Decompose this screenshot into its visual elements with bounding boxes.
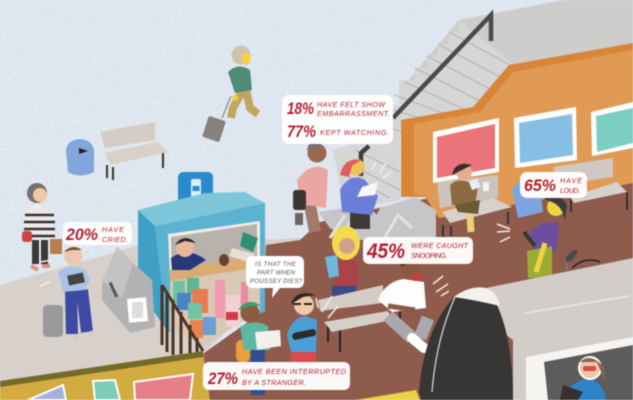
callout: 65%: HAVE xyxy=(560,176,582,185)
man with glasses xyxy=(287,293,317,390)
traveller with suitcase xyxy=(202,46,258,142)
seated reader xyxy=(450,164,489,232)
speech bubble: PART WHEN xyxy=(257,270,296,276)
callout: 45%: WERE CAUGHT xyxy=(411,241,469,250)
painting: lower teal xyxy=(93,380,120,400)
kiosk merchandise xyxy=(173,278,248,338)
escalator machines xyxy=(318,197,436,240)
trash can: upper left xyxy=(66,139,94,176)
woman in striped top xyxy=(22,183,62,270)
speech bubble: IS THAT THE xyxy=(255,261,297,268)
callout: 20%: HAVE xyxy=(102,225,124,234)
painting: blue xyxy=(514,107,577,168)
painting: pink xyxy=(433,118,499,183)
yellow platform strip xyxy=(356,390,420,400)
ticket machine xyxy=(102,247,155,333)
staircase railing xyxy=(162,285,203,355)
kiosk clerk xyxy=(171,238,229,270)
callout: 20%: CRIED. xyxy=(102,235,128,244)
trash can: right xyxy=(512,180,543,218)
ticket kiosk xyxy=(138,192,265,345)
callout: 27% xyxy=(203,362,350,390)
painting: teal xyxy=(591,102,633,156)
train xyxy=(419,258,633,400)
callout: 20%: 20% xyxy=(65,225,98,244)
suitcase: man's xyxy=(43,305,63,337)
callout: 45%: SNOOPING. xyxy=(411,251,447,260)
upper grey wall xyxy=(400,0,633,125)
bench: centre xyxy=(318,285,400,352)
lower handrail xyxy=(361,146,369,176)
callout: 27%: HAVE BEEN INTERRUPTED xyxy=(242,367,346,376)
bench: upper left xyxy=(100,122,168,180)
callout: 27%: 27% xyxy=(207,369,238,388)
man with tablet xyxy=(58,247,94,338)
callout: 18% and 77%: 18% xyxy=(287,99,314,118)
beige floor xyxy=(0,238,300,384)
callout: 18% and 77%: KEPT WATCHING. xyxy=(320,128,389,137)
bench: seated reader xyxy=(437,175,512,238)
callout: 20% xyxy=(63,222,132,245)
speech bubble xyxy=(246,256,304,298)
speech bubble: POUSSEY DIES? xyxy=(250,278,303,285)
callout: 45%: 45% xyxy=(366,240,405,263)
woman reading with red hair xyxy=(340,158,378,229)
painting: lower pink xyxy=(134,374,193,400)
callout: 65%: 65% xyxy=(524,176,556,195)
yellow lower wall xyxy=(0,351,210,400)
orange wall xyxy=(401,43,633,218)
callout: 27%: BY A STRANGER. xyxy=(242,378,306,387)
callout: 65%: LOUD. xyxy=(560,186,580,195)
man on phone in white shirt xyxy=(378,259,428,348)
painting: lower purple xyxy=(28,385,66,400)
kiosk computer xyxy=(229,232,258,261)
callout: 45% xyxy=(363,237,473,264)
stair handrail xyxy=(393,15,491,118)
callout: 65% xyxy=(520,172,587,198)
bench: right xyxy=(553,158,627,212)
callout: 18% and 77% xyxy=(282,95,393,144)
blonde woman with book xyxy=(325,226,360,296)
bicycle seat and wheel xyxy=(566,249,600,270)
brown platform floor xyxy=(204,165,633,400)
callout: 18% and 77%: EMBARRASSMENT. xyxy=(317,109,390,118)
laughing cyclist xyxy=(524,196,567,278)
callout: 18% and 77%: HAVE FELT SHOW xyxy=(317,100,386,109)
woman in train window xyxy=(560,357,606,400)
girl with newspaper xyxy=(236,302,281,395)
callout: 18% and 77%: 77% xyxy=(287,122,316,141)
motion marks xyxy=(40,162,510,318)
pink shirt man xyxy=(293,142,328,232)
staircase xyxy=(333,20,512,210)
sign: train icon xyxy=(178,172,213,208)
